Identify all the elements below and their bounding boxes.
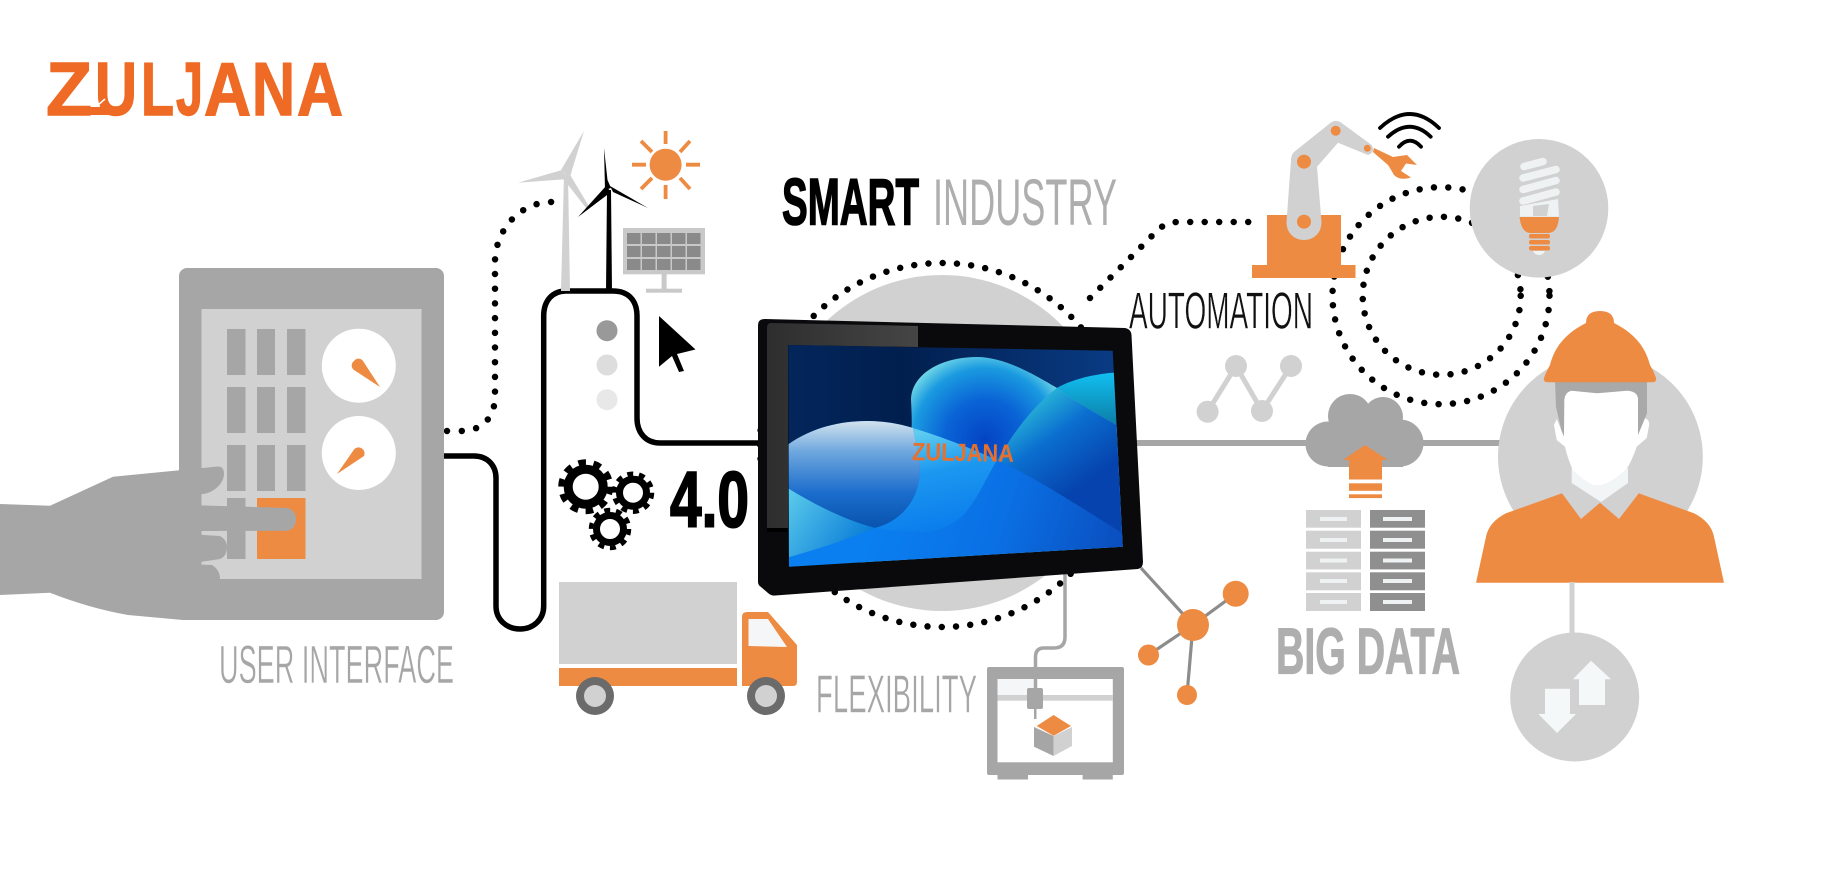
- label: USER INTERFACE: USER INTERFACE: [219, 635, 454, 695]
- logo: ZULJANA: [46, 47, 343, 131]
- neck: [1572, 468, 1628, 502]
- connector: monitor to 3D printer: [1036, 570, 1065, 688]
- label: BIG DATA: BIG DATA: [1276, 614, 1460, 688]
- icon: 3D printer: [987, 667, 1124, 780]
- icon: worker: [1476, 311, 1724, 583]
- background circle behind monitor: [774, 275, 1110, 611]
- icon: pointing hand: [0, 466, 296, 620]
- active orange button: [257, 498, 306, 559]
- monitor: [758, 319, 1143, 596]
- dotted ring around monitor: [760, 263, 1124, 627]
- cable: tablet through controller to monitor: [443, 291, 762, 629]
- face: [1554, 391, 1649, 485]
- button grid: [227, 329, 306, 559]
- gauge: upper dial: [322, 329, 396, 403]
- screen wallpaper: [780, 340, 1130, 575]
- logo: ZULJANA: Z: [46, 47, 92, 131]
- icon: robot arm: [1252, 121, 1417, 278]
- logo: ZULJANA: A: [297, 47, 343, 131]
- icon: solar panel: [623, 228, 705, 293]
- data line: monitor to worker: [1130, 440, 1510, 446]
- hair: [1555, 380, 1647, 437]
- icon: cloud: [1306, 394, 1424, 467]
- dotted connector: tablet to wind turbine: [447, 202, 552, 431]
- screen logo: ZULJANA: [912, 438, 1014, 468]
- icon: controller status lights: [596, 320, 618, 410]
- logo: ZULJANA: U: [95, 47, 137, 131]
- icon: upload arrow: [1343, 445, 1388, 498]
- logo: ZULJANA: L: [141, 47, 174, 131]
- label: FLEXIBILITY: FLEXIBILITY: [816, 665, 977, 725]
- title: SMART INDUSTRY: SMART: [782, 164, 919, 238]
- logo: ZULJANA: N: [252, 47, 295, 131]
- title: SMART INDUSTRY: INDUSTRY: [933, 165, 1117, 239]
- chart: small line graph: [1197, 355, 1302, 423]
- helmet: [1544, 311, 1656, 382]
- icon: sun: [632, 131, 700, 199]
- printed cube: [1034, 715, 1072, 756]
- logo: ZULJANA: J: [176, 47, 203, 131]
- gauge: lower dial: [322, 416, 396, 490]
- wrench: [1373, 148, 1417, 179]
- icon: network nodes: [1138, 568, 1249, 705]
- logo: ZULJANA: A: [204, 47, 251, 131]
- icon: data exchange arrows: [1510, 632, 1639, 762]
- panel: tablet user interface: [179, 268, 444, 620]
- dotted rings around light bulb: [1332, 187, 1550, 404]
- icon: wifi: [1380, 114, 1439, 147]
- title: SMART INDUSTRY: [782, 164, 1117, 239]
- icon: grey wind turbine: [518, 131, 590, 291]
- connector: worker to data exchange: [1570, 582, 1574, 634]
- dotted connector: monitor to robot: [1090, 222, 1250, 298]
- shirt: [1476, 493, 1724, 583]
- icon: cursor arrow: [659, 316, 696, 372]
- icon: delivery truck: [559, 582, 797, 715]
- icon: light bulb: [1470, 139, 1608, 278]
- label: AUTOMATION: AUTOMATION: [1129, 283, 1313, 341]
- icon: black wind turbine: [578, 148, 648, 291]
- icon: data storage drawers: [1306, 510, 1425, 611]
- icon: gears: [561, 462, 652, 548]
- label: 4.0: 4.0: [670, 454, 749, 544]
